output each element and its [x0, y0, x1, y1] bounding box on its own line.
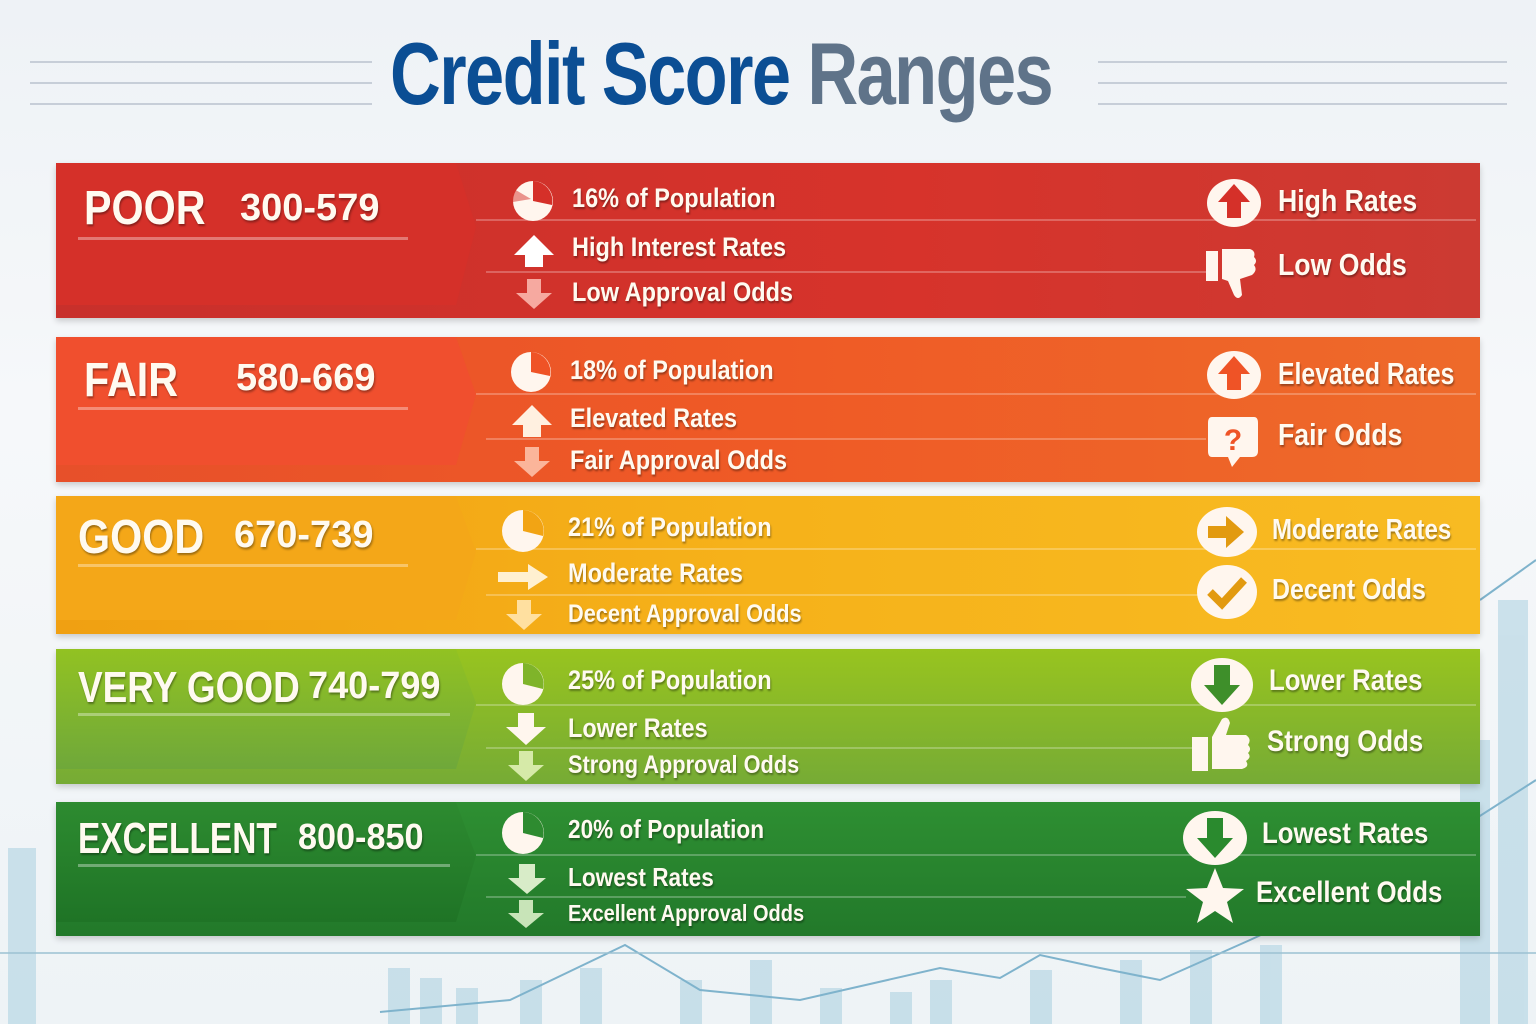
- fair item 2: Elevated Rates: [570, 403, 737, 433]
- question bubble: ?: [1224, 424, 1242, 457]
- band: excellent: [56, 802, 1480, 936]
- right: moderate rates: Moderate Rates: [1272, 514, 1451, 546]
- down arrow: [506, 600, 542, 630]
- check icon: [1197, 565, 1257, 619]
- thumbs down: [1206, 249, 1256, 298]
- right: excellent odds: Excellent Odds: [1256, 876, 1442, 909]
- fair title: FAIR: [84, 354, 178, 407]
- very good title: VERY GOOD: [78, 663, 300, 712]
- pie icon: [513, 181, 553, 221]
- right: elevated rates: Elevated Rates: [1278, 356, 1454, 391]
- down arrow: [508, 900, 544, 928]
- good item 2: Moderate Rates: [568, 558, 743, 588]
- down icon: [1183, 811, 1247, 865]
- band: poor: [56, 163, 1480, 318]
- right: high rates: High Rates: [1278, 183, 1417, 218]
- band: good: [56, 496, 1480, 634]
- right: decent odds: Decent Odds: [1272, 574, 1426, 606]
- right: fair odds: Fair Odds: [1278, 417, 1402, 452]
- pie icon: [502, 663, 544, 705]
- good item 1: 21% of Population: [568, 512, 772, 542]
- up arrow: [514, 235, 554, 267]
- right: low odds: Low Odds: [1278, 247, 1407, 282]
- fair item 1: 18% of Population: [570, 355, 774, 385]
- poor range: 300-579: [240, 187, 379, 229]
- very good item 2: Lower Rates: [568, 713, 708, 743]
- fair range: 580-669: [236, 357, 375, 399]
- very good range: 740-799: [308, 665, 440, 707]
- down arrow: [508, 751, 544, 781]
- question bubble: [1208, 417, 1258, 467]
- down arrow: [516, 279, 552, 309]
- right: lowest rates: Lowest Rates: [1262, 817, 1428, 850]
- poor title: POOR: [84, 182, 206, 235]
- pie icon: [511, 352, 551, 392]
- right icon up: [1207, 351, 1261, 399]
- pie icon: [502, 510, 544, 552]
- down arrow: [508, 864, 546, 894]
- excellent item 2: Lowest Rates: [568, 862, 714, 892]
- right icon up: [1207, 179, 1261, 227]
- very good item 1: 25% of Population: [568, 665, 772, 695]
- band: fair: [56, 337, 1480, 482]
- good item 3: Decent Approval Odds: [568, 600, 802, 628]
- excellent item 3: Excellent Approval Odds: [568, 900, 804, 926]
- good title: GOOD: [78, 511, 204, 564]
- very good item 3: Strong Approval Odds: [568, 751, 799, 779]
- star: [1186, 868, 1244, 923]
- background chart: [0, 559, 1536, 1024]
- band: very good: [56, 649, 1480, 784]
- title: Credit Score Ranges: [390, 24, 1052, 123]
- up arrow: [512, 405, 552, 437]
- down arrow: [506, 713, 546, 745]
- good range: 670-739: [234, 514, 373, 556]
- excellent range: 800-850: [298, 816, 424, 857]
- pie icon: [502, 812, 544, 854]
- right arrow: [498, 564, 548, 590]
- thumbs up: [1192, 718, 1250, 771]
- right arrow icon: [1197, 507, 1257, 557]
- down arrow: [514, 447, 550, 477]
- right: strong odds: Strong Odds: [1267, 725, 1423, 758]
- poor item 1: 16% of Population: [572, 183, 776, 213]
- title lines: [30, 61, 1507, 105]
- poor item 3: Low Approval Odds: [572, 277, 793, 307]
- fair item 3: Fair Approval Odds: [570, 445, 787, 475]
- excellent item 1: 20% of Population: [568, 814, 764, 844]
- right: lower rates: Lower Rates: [1269, 664, 1422, 697]
- down icon: [1191, 658, 1253, 712]
- poor item 2: High Interest Rates: [572, 232, 786, 262]
- excellent title: EXCELLENT: [78, 814, 277, 863]
